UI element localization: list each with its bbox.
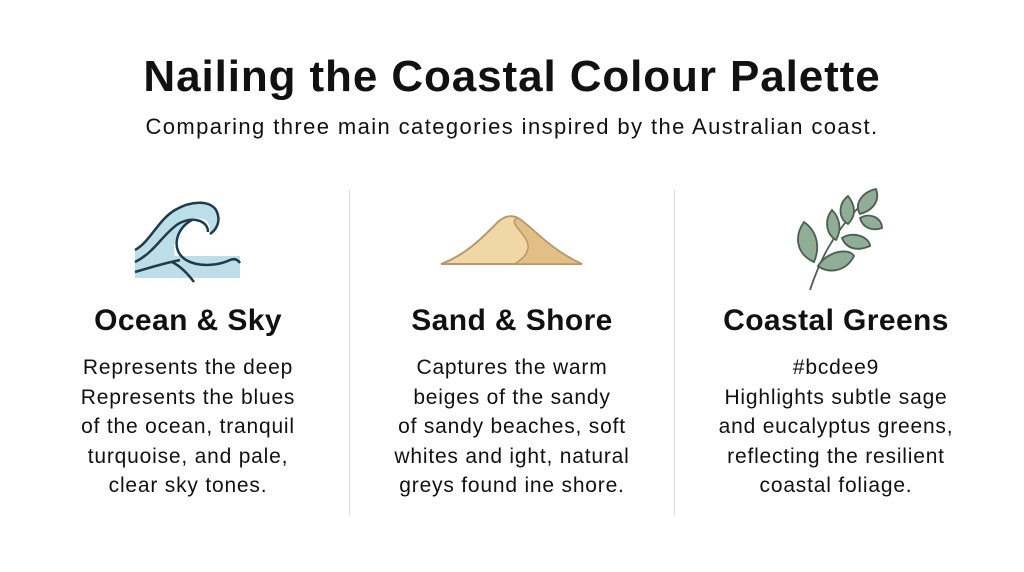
text: greens: Highlights subtle sage	[724, 386, 948, 408]
text: sand: beiges of the sandy	[413, 386, 611, 408]
text: ocean: Represents the blues	[81, 386, 295, 408]
heading: sand: Sand & Shore	[411, 304, 613, 337]
heading: greens: Coastal Greens	[723, 304, 949, 337]
text: ocean: clear sky tones.	[109, 474, 267, 497]
text: greens	[719, 356, 953, 497]
text: sand	[394, 356, 630, 497]
icon: eucalyptus sprig	[797, 188, 883, 290]
text: greens: #bcdee9	[793, 356, 879, 379]
text: sand: whites and ight, natural	[394, 444, 630, 468]
panel: ocean & sky	[81, 304, 295, 497]
text: ocean: of the ocean, tranquil	[81, 415, 295, 438]
text: sand: of sandy beaches, soft	[398, 415, 626, 438]
icon: sand dune	[440, 215, 582, 265]
text: greens: reflecting the resilient	[727, 444, 945, 468]
text: sand: greys found ine shore.	[399, 474, 625, 497]
subtitle: Comparing three main categories inspired by the Australian coast.	[145, 114, 878, 139]
heading: ocean: Ocean & Sky	[94, 304, 282, 337]
icon: wave	[134, 202, 241, 283]
panel: sand & shore	[394, 304, 630, 497]
text: sand: Captures the warm	[416, 356, 608, 379]
text: ocean: turquoise, and pale,	[88, 444, 288, 468]
text: greens: and eucalyptus greens,	[719, 415, 953, 438]
text: greens: coastal foliage.	[760, 474, 912, 497]
title: Nailing the Coastal Colour Palette	[143, 52, 881, 101]
text: ocean: Represents the deep	[83, 356, 293, 379]
panel: coastal greens	[719, 304, 953, 497]
text: ocean	[81, 356, 295, 497]
